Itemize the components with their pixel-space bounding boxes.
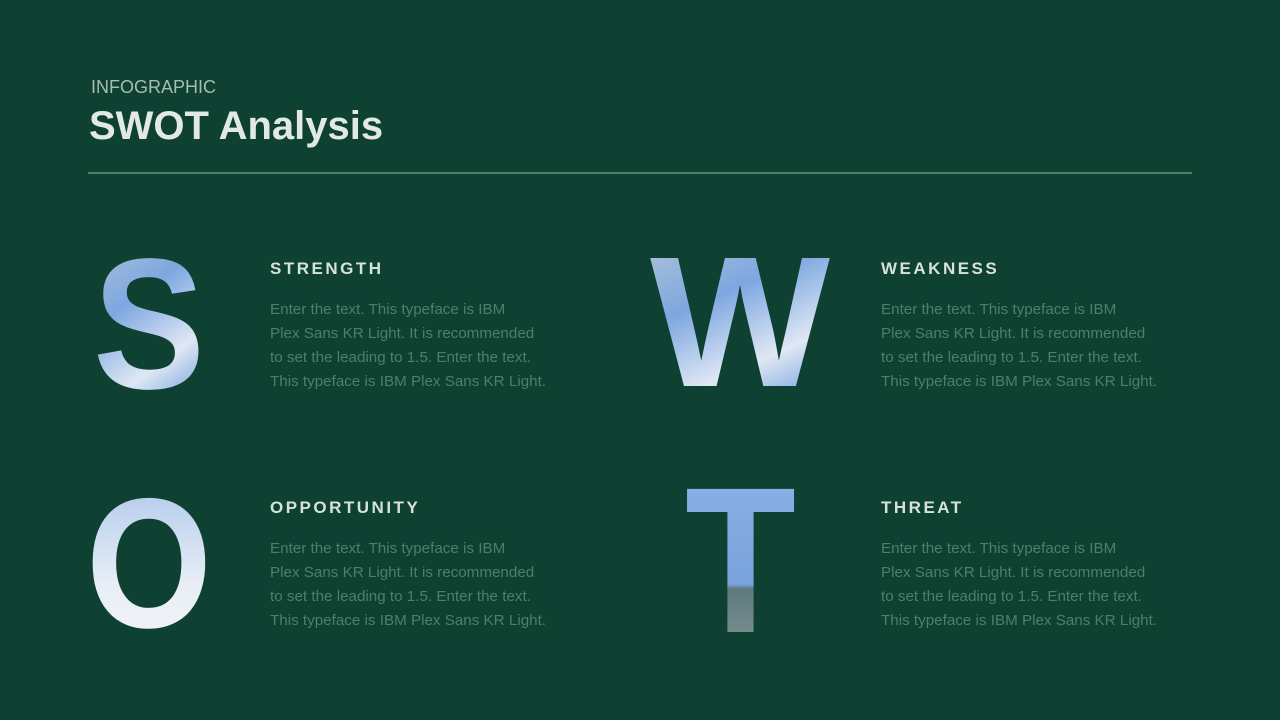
panel: weakness [881, 259, 1157, 390]
panel: weakness: Plex Sans KR Light. It is recommended [881, 325, 1145, 342]
panel: opportunity [270, 498, 546, 629]
panel: strength: This typeface is IBM Plex Sans KR Light. [270, 373, 546, 390]
divider [88, 172, 1192, 174]
panel: opportunity: OPPORTUNITY [270, 498, 420, 517]
panel: weakness: This typeface is IBM Plex Sans KR Light. [881, 373, 1157, 390]
letter S: S [93, 221, 205, 428]
panel: threat: to set the leading to 1.5. Enter the text. [881, 588, 1142, 605]
panel: threat: Enter the text. This typeface is IBM [881, 540, 1116, 557]
panel: opportunity: Enter the text. This typeface is IBM [270, 540, 505, 557]
letter T: T [685, 445, 796, 677]
panel: strength: to set the leading to 1.5. Enter the text. [270, 349, 531, 366]
panel: threat: Plex Sans KR Light. It is recommended [881, 564, 1145, 581]
panel: weakness: Enter the text. This typeface is IBM [881, 301, 1116, 318]
panel: strength: Plex Sans KR Light. It is recommended [270, 325, 534, 342]
panel: opportunity: to set the leading to 1.5. Enter the text. [270, 588, 531, 605]
panel: threat: THREAT [881, 498, 964, 517]
panel: strength: Enter the text. This typeface is IBM [270, 301, 505, 318]
title: SWOT Analysis [89, 104, 383, 148]
subtitle: INFOGRAPHIC [91, 77, 216, 97]
letter W: W [650, 219, 830, 426]
panel: opportunity: This typeface is IBM Plex Sans KR Light. [270, 612, 546, 629]
panel: weakness: WEAKNESS [881, 259, 999, 278]
panel: strength [270, 259, 546, 390]
letter O: O [86, 461, 212, 667]
panel: threat [881, 498, 1157, 629]
panel: weakness: to set the leading to 1.5. Enter the text. [881, 349, 1142, 366]
panel: strength: STRENGTH [270, 259, 384, 278]
panel: threat: This typeface is IBM Plex Sans KR Light. [881, 612, 1157, 629]
panel: opportunity: Plex Sans KR Light. It is recommended [270, 564, 534, 581]
